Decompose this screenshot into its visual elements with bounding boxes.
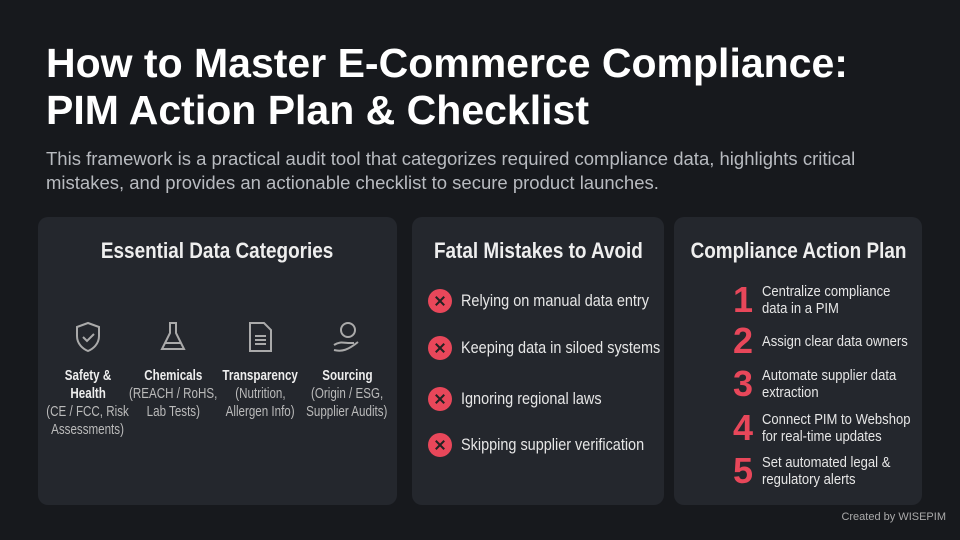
step 2: Assign clear data owners bbox=[762, 332, 908, 350]
step 3: Automate supplier data bbox=[762, 367, 896, 384]
panel: fatal mistakes bbox=[412, 217, 664, 505]
step 2 bbox=[733, 320, 908, 361]
heading: fatal mistakes: Fatal Mistakes to Avoid bbox=[434, 238, 642, 263]
subtitle: mistakes, and provides an actionable checklist to secure product launches. bbox=[46, 172, 659, 193]
category: transparency: Allergen Info) bbox=[226, 404, 294, 420]
category: chemicals bbox=[129, 322, 217, 420]
category: safety: Health bbox=[70, 386, 106, 402]
step 2: 2 bbox=[733, 320, 753, 361]
category: transparency: (Nutrition, bbox=[235, 386, 285, 402]
step 4: Connect PIM to Webshop bbox=[762, 411, 910, 428]
category: transparency bbox=[222, 322, 298, 420]
footer credit: Created by WISEPIM bbox=[841, 511, 946, 523]
category: sourcing: Sourcing bbox=[322, 368, 372, 384]
subtitle: This framework is a practical audit tool that categorizes required compliance data, highlights critical bbox=[46, 148, 855, 169]
step 3 bbox=[733, 363, 896, 404]
mistake 4 bbox=[428, 433, 644, 457]
step 5: 5 bbox=[733, 450, 753, 491]
mistake 2 bbox=[428, 336, 660, 360]
step 1: 1 bbox=[733, 279, 753, 320]
title: How to Master E-Commerce Compliance: bbox=[46, 40, 848, 86]
category: chemicals: (REACH / RoHS, bbox=[129, 386, 217, 402]
mistake 4: Skipping supplier verification bbox=[461, 435, 644, 454]
category: sourcing bbox=[306, 322, 388, 420]
step 5 bbox=[733, 450, 890, 491]
category: safety: (CE / FCC, Risk bbox=[47, 404, 129, 420]
category: chemicals: Chemicals bbox=[144, 368, 202, 384]
panel: essential data categories bbox=[38, 217, 397, 505]
step 1: data in a PIM bbox=[762, 300, 839, 317]
category: safety: Assessments) bbox=[52, 422, 124, 438]
category: sourcing: Supplier Audits) bbox=[306, 404, 388, 420]
step 4 bbox=[733, 407, 910, 448]
step 4: 4 bbox=[733, 407, 753, 448]
subtitle bbox=[46, 148, 855, 193]
panel: action plan bbox=[674, 217, 922, 505]
category: sourcing: (Origin / ESG, bbox=[311, 386, 383, 402]
step 5: regulatory alerts bbox=[762, 471, 856, 488]
category: chemicals: Lab Tests) bbox=[146, 404, 200, 420]
mistake 3 bbox=[428, 387, 602, 411]
heading: essential data categories: Essential Data Categories bbox=[101, 238, 334, 263]
step 3: extraction bbox=[762, 384, 819, 401]
mistake 1: Relying on manual data entry bbox=[461, 291, 649, 310]
step 5: Set automated legal & bbox=[762, 454, 890, 471]
mistake 3: Ignoring regional laws bbox=[461, 389, 602, 408]
heading: action plan: Compliance Action Plan bbox=[690, 238, 906, 263]
step 4: for real-time updates bbox=[762, 428, 882, 445]
title bbox=[46, 40, 848, 133]
step 1 bbox=[733, 279, 890, 320]
mistake 1 bbox=[428, 289, 649, 313]
category: transparency: Transparency bbox=[222, 368, 298, 384]
title: PIM Action Plan & Checklist bbox=[46, 87, 589, 133]
mistake 2: Keeping data in siloed systems bbox=[461, 338, 660, 357]
step 3: 3 bbox=[733, 363, 753, 404]
step 1: Centralize compliance bbox=[762, 283, 890, 300]
category: safety bbox=[47, 322, 129, 438]
category: safety: Safety & bbox=[65, 368, 111, 384]
